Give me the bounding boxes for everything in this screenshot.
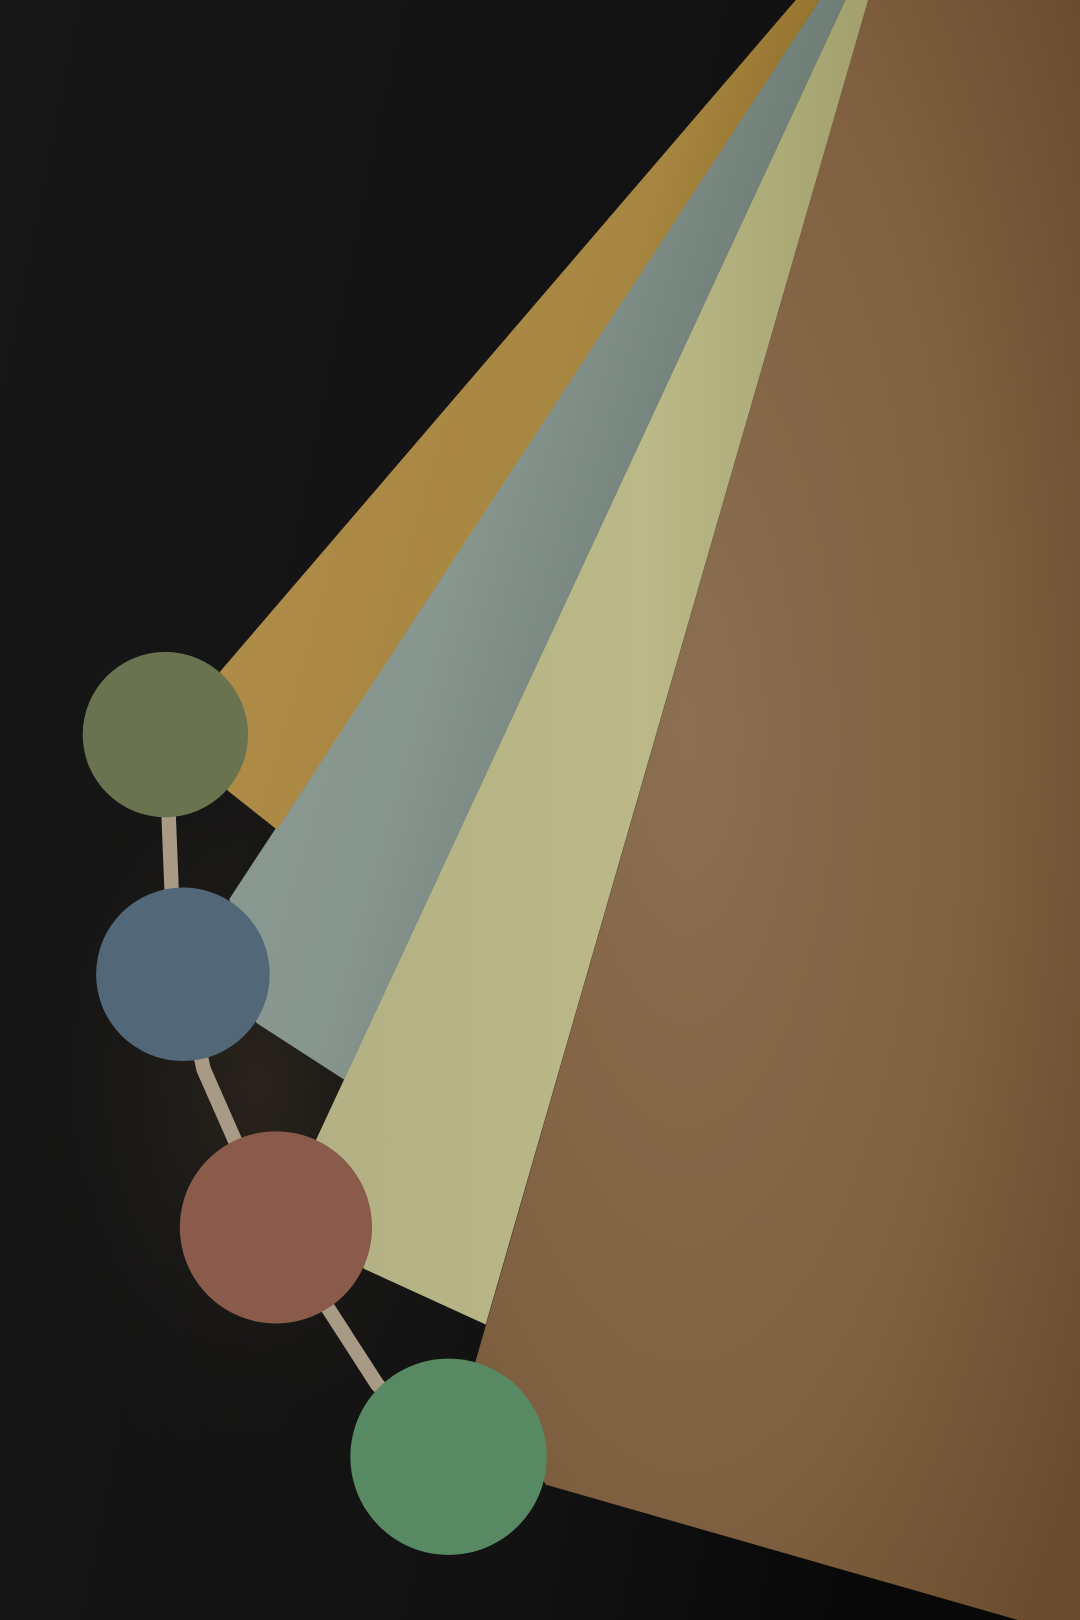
panel: gray-blue wedge — [229, 0, 845, 1080]
icon: olive circle — [83, 652, 248, 817]
connector line — [165, 735, 449, 1457]
icon: red circle — [180, 1131, 372, 1323]
panel: yellow-green wedge — [315, 0, 868, 1325]
panel: brown wedge — [475, 0, 1080, 1620]
icon: blue circle — [96, 887, 270, 1061]
panel: orange wedge — [220, 0, 820, 830]
icon: green circle — [350, 1359, 547, 1555]
